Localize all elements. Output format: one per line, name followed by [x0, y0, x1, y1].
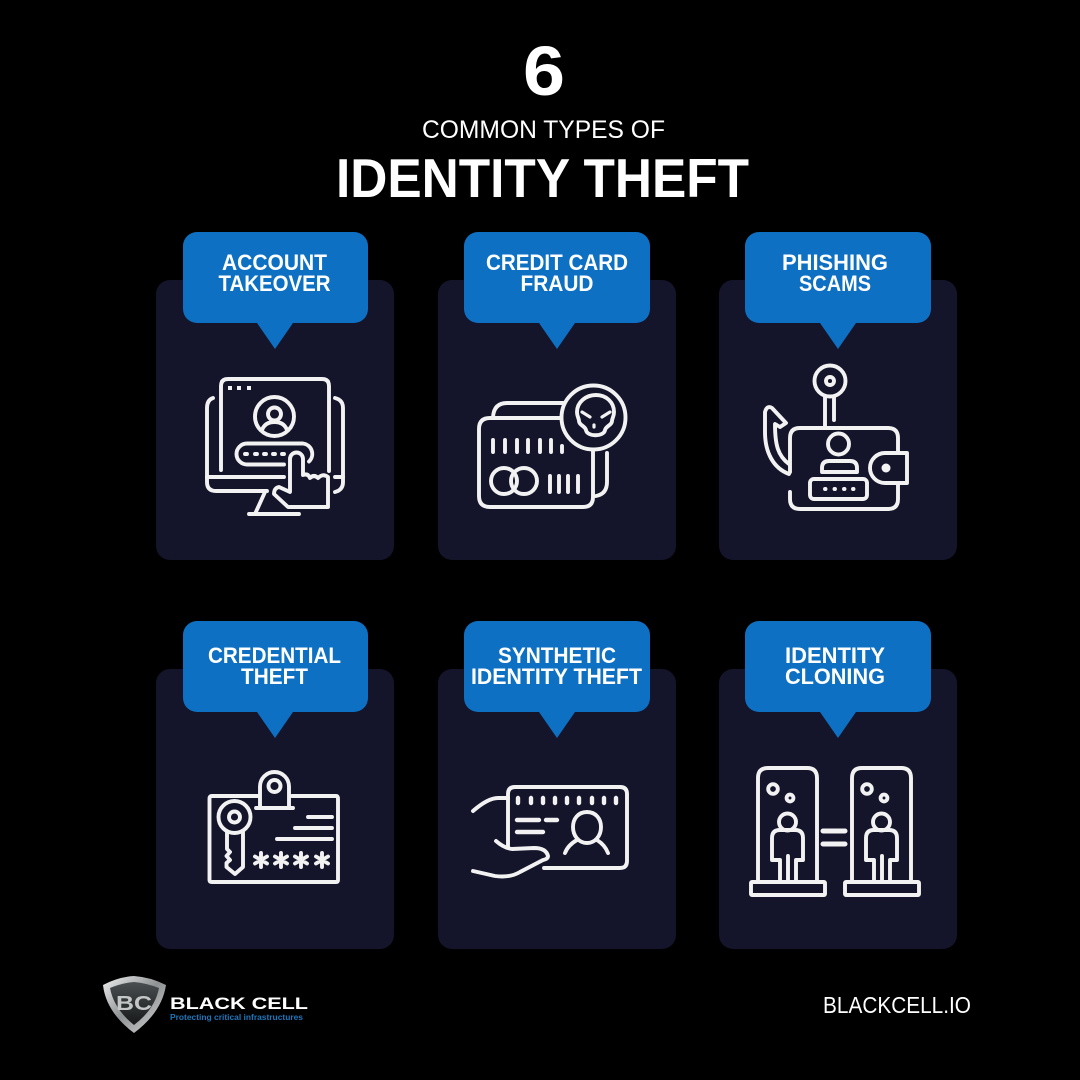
- panel background: [156, 280, 394, 560]
- label text: SYNTHETIC: [498, 643, 616, 668]
- panel: phishing scams: [719, 232, 957, 560]
- label text: CREDENTIAL: [208, 643, 341, 668]
- icon: credit card with skull: [479, 386, 626, 507]
- label bubble: [183, 232, 368, 349]
- label text: FRAUD: [520, 271, 594, 296]
- website url: BLACKCELL.IO: [823, 992, 971, 1018]
- panel: synthetic identity theft: [438, 621, 676, 949]
- label text: [486, 250, 628, 296]
- panel: credit card fraud: [438, 232, 676, 560]
- logo: black cell: [103, 976, 308, 1033]
- panel background: [719, 280, 957, 560]
- panel: account takeover: [156, 232, 394, 560]
- title: [336, 32, 749, 209]
- label bubble: [183, 621, 368, 738]
- label text: [471, 643, 643, 689]
- icon: shield: BC: [116, 993, 152, 1015]
- label bubble: [745, 232, 931, 349]
- title subheading: COMMON TYPES OF: [422, 116, 665, 144]
- panel: credential theft: [156, 621, 394, 949]
- label text: IDENTITY THEFT: [471, 664, 643, 689]
- panel background: [156, 669, 394, 949]
- label text: PHISHING: [782, 250, 888, 275]
- label text: IDENTITY: [785, 643, 885, 668]
- label text: ACCOUNT: [222, 250, 328, 275]
- label bubble: [745, 621, 931, 738]
- icon: hand holding id card: [473, 787, 627, 876]
- title number: 6: [523, 32, 565, 110]
- label text: CREDIT CARD: [486, 250, 628, 275]
- label text: [782, 250, 888, 296]
- logo tagline: Protecting critical infrastructures: [170, 1013, 304, 1022]
- title main heading: IDENTITY THEFT: [336, 147, 749, 209]
- icon: wallet on fishing hook: [765, 366, 907, 509]
- label text: CLONING: [785, 664, 885, 689]
- panel background: [719, 669, 957, 949]
- label text: [218, 250, 331, 296]
- icon: two cloning tubes with equal sign: [751, 768, 919, 895]
- label text: [785, 643, 885, 689]
- panel background: [438, 280, 676, 560]
- label text: THEFT: [241, 664, 309, 689]
- icon: id badge with key and password: [210, 772, 338, 882]
- panel background: [438, 669, 676, 949]
- label text: SCAMS: [799, 271, 871, 296]
- icon: computer login with pointing hand: [207, 379, 343, 514]
- logo wordmark: BLACK CELL: [170, 994, 308, 1013]
- icon: shield: [103, 976, 166, 1033]
- label text: [208, 643, 341, 689]
- label bubble: [464, 621, 650, 738]
- panel: identity cloning: [719, 621, 957, 949]
- label text: TAKEOVER: [218, 271, 331, 296]
- label bubble: [464, 232, 650, 349]
